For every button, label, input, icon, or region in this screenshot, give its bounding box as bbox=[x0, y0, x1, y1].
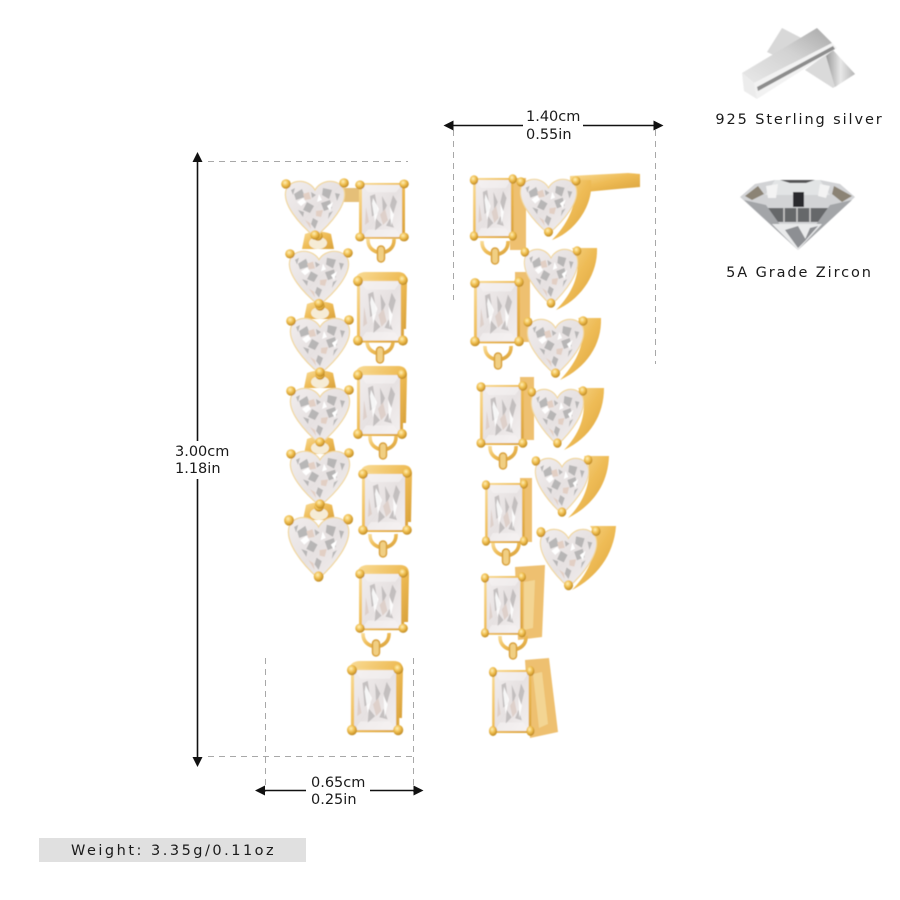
heart stones bbox=[281, 178, 354, 582]
dimension: width 0.65cm: 0.65cm bbox=[311, 775, 365, 791]
dashed guide lines bbox=[208, 130, 656, 792]
dimension: height 3.00cm: 1.18in bbox=[175, 461, 221, 477]
gold side walls bbox=[510, 178, 558, 738]
dimension: height 3.00cm: 3.00cm bbox=[175, 444, 229, 460]
rectangular stones bbox=[470, 174, 534, 736]
weight bar: Weight: 3.35g/0.11oz bbox=[71, 843, 276, 859]
right earring bbox=[470, 173, 640, 738]
label: 925 Sterling silver: 925 Sterling silver bbox=[715, 112, 884, 128]
icon: silver bars bbox=[742, 28, 855, 99]
dimension: width 1.40cm: 0.55in bbox=[526, 127, 572, 143]
dimension: width 1.40cm: 1.40cm bbox=[526, 109, 580, 125]
rectangle column links bbox=[482, 241, 526, 659]
rectangular stones bbox=[347, 179, 412, 735]
dimension: width 1.40cm bbox=[444, 109, 664, 143]
icon: zircon diamond bbox=[740, 180, 855, 250]
heart backs bbox=[552, 180, 616, 590]
label: 5A Grade Zircon: 5A Grade Zircon bbox=[726, 265, 873, 281]
dimension: width 0.65cm: 0.25in bbox=[311, 792, 357, 808]
ear post bbox=[570, 173, 640, 192]
rectangle shoulders bbox=[349, 272, 412, 718]
post stub bbox=[340, 188, 364, 202]
window cutouts bbox=[524, 580, 548, 728]
dimension: height 3.00cm bbox=[170, 152, 232, 767]
dimension: width 0.65cm bbox=[255, 775, 424, 808]
heart stones bbox=[516, 176, 601, 590]
rectangle column links bbox=[363, 239, 396, 656]
weight bar bbox=[39, 838, 306, 862]
left earring bbox=[281, 178, 412, 735]
heart column links bbox=[302, 231, 336, 520]
